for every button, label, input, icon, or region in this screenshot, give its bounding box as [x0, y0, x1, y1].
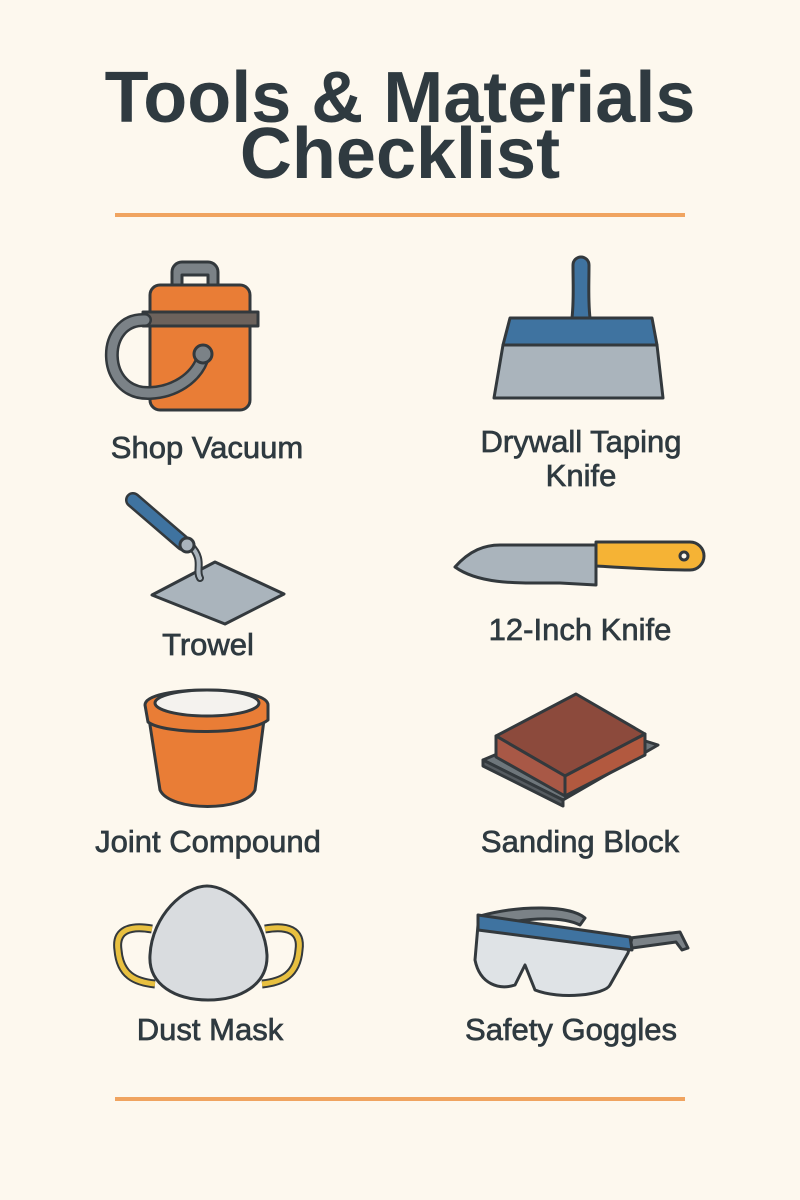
icon: 12-inch knife	[455, 542, 704, 585]
icon: dust mask	[118, 886, 299, 1000]
icon: trowel	[133, 500, 284, 624]
icon: shop vacuum	[112, 262, 258, 410]
label: safety goggles: Safety Goggles	[465, 1012, 677, 1047]
title: Checklist	[240, 114, 560, 194]
label: joint compound: Joint Compound	[95, 824, 321, 859]
icon: drywall taping knife	[494, 257, 663, 398]
title: Tools & Materials	[105, 58, 695, 138]
title	[105, 58, 695, 194]
icon: joint compound bucket	[145, 690, 268, 806]
text: Knife	[546, 458, 616, 493]
icon: sanding block	[483, 694, 658, 806]
label: trowel: Trowel	[162, 627, 254, 662]
label: 12-inch knife: 12-Inch Knife	[489, 612, 671, 647]
label: drywall taping knife: Drywall Taping	[480, 424, 682, 459]
label: dust mask: Dust Mask	[137, 1012, 284, 1047]
icon: safety goggles	[475, 908, 688, 995]
label: sanding block: Sanding Block	[481, 824, 680, 859]
label: shop vacuum: Shop Vacuum	[111, 430, 303, 465]
